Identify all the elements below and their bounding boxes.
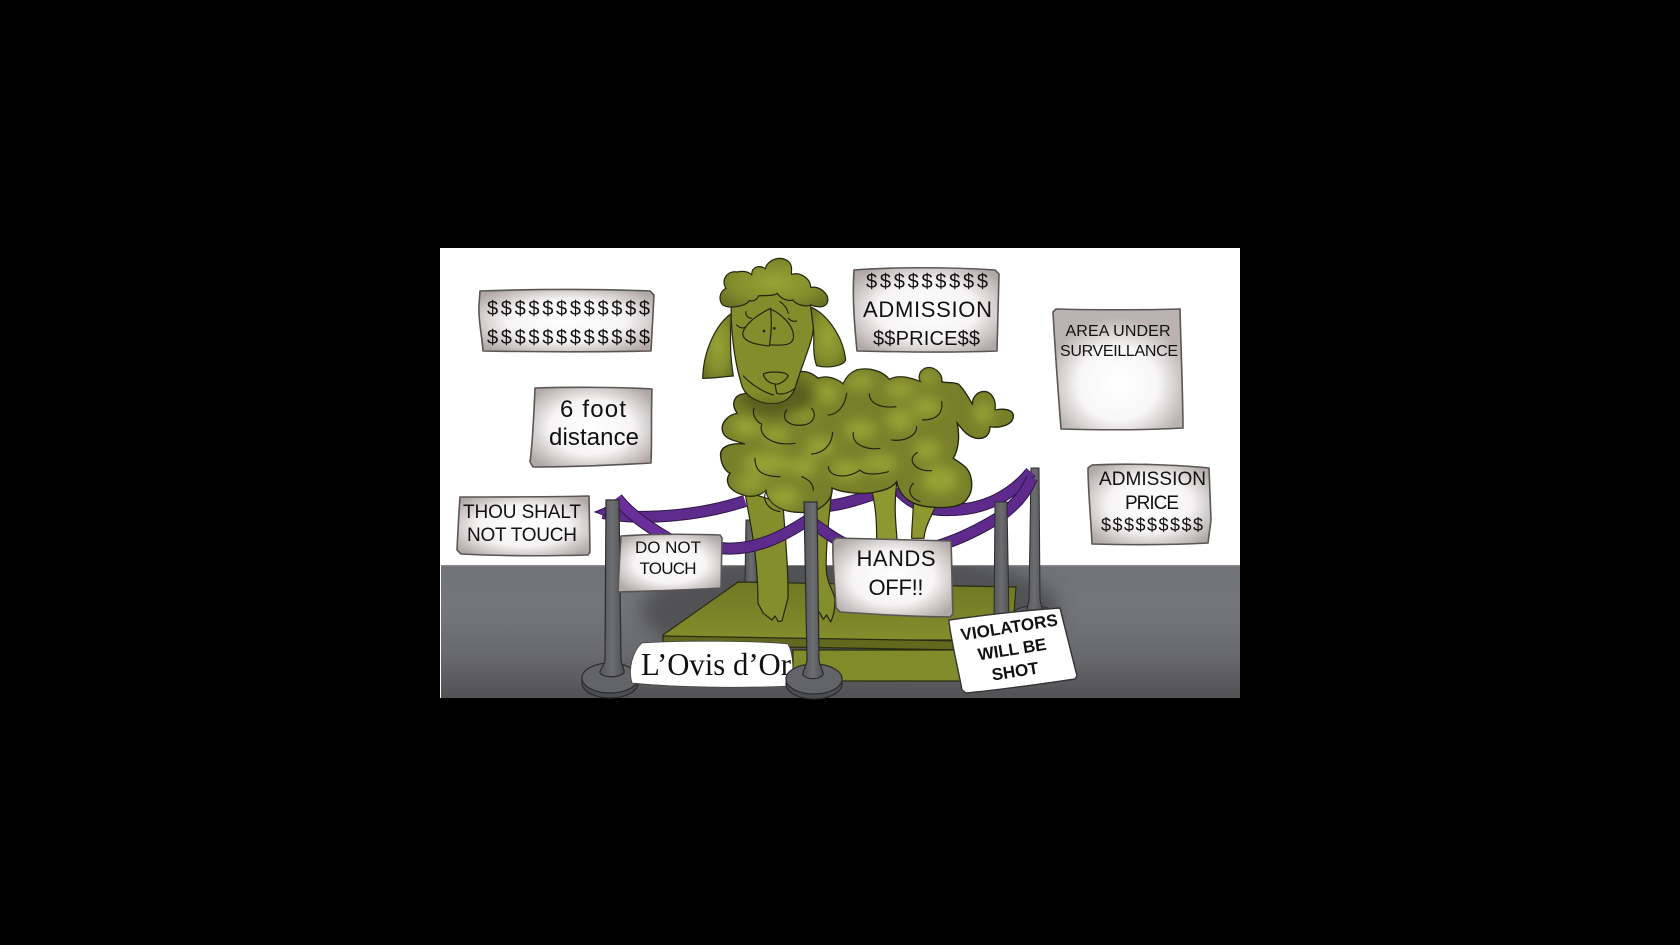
- sheep ears: [703, 307, 846, 378]
- back stanchion posts: [745, 468, 1054, 620]
- sign: dollars banner: $$$$$$$$$$$$: [487, 298, 650, 320]
- sign: area under surveillance: [1053, 309, 1183, 430]
- sign: dollars banner: [479, 290, 654, 352]
- front centre stanchion: [786, 502, 842, 699]
- background panel: [440, 248, 1240, 698]
- sign: do not touch: [618, 534, 722, 592]
- sign: area under surveillance: AREA UNDER: [1066, 323, 1170, 340]
- sign: 6 foot distance: distance: [549, 424, 639, 451]
- sign: violators will be shot: [949, 608, 1077, 693]
- sign: admission price right: ADMISSION: [1099, 469, 1206, 490]
- sign: admission price right: $$$$$$$$$: [1101, 515, 1203, 535]
- sign: admission price top: [853, 268, 999, 352]
- sign: L'Ovis d'Or: L’Ovis d’Or: [641, 646, 791, 682]
- sign: 6 foot distance: 6 foot: [560, 396, 626, 423]
- sign: violators will be shot: VIOLATORS: [959, 611, 1059, 645]
- back velvet rope: [595, 472, 1031, 542]
- sign: admission price top: $$PRICE$$: [873, 328, 980, 350]
- sign: thou shalt not touch: THOU SHALT: [463, 502, 581, 523]
- sign: hands off: OFF!!: [868, 575, 924, 600]
- sign: thou shalt not touch: NOT TOUCH: [467, 525, 577, 546]
- sheep legs: [745, 483, 937, 622]
- sign: violators will be shot: SHOT: [990, 658, 1040, 685]
- sign: dollars banner: $$$$$$$$$$$$: [487, 327, 650, 349]
- sign: admission price top: $$$$$$$$$: [866, 271, 988, 293]
- sheep wool body: [721, 368, 1013, 512]
- gallery floor: [441, 565, 1240, 698]
- sheep head: [719, 258, 828, 404]
- sign: area under surveillance: SURVEILLANCE: [1060, 343, 1178, 360]
- sign: 6 foot distance: [530, 387, 652, 467]
- front velvet rope: [720, 478, 1032, 553]
- sheep head wool tuft: [720, 258, 828, 307]
- sign: thou shalt not touch: [457, 496, 590, 556]
- sign: hands off: [833, 538, 953, 617]
- stepped pedestal: [663, 582, 1016, 681]
- sign: admission price right: PRICE: [1125, 493, 1179, 514]
- front left stanchion: [582, 500, 638, 698]
- sheep face: [737, 302, 797, 395]
- sign: do not touch: DO NOT: [635, 538, 701, 557]
- sheep statue: [703, 258, 1013, 622]
- sign: violators will be shot: WILL BE: [977, 635, 1048, 664]
- back right stanchion: [994, 502, 1009, 620]
- sign: admission price right: [1088, 464, 1211, 545]
- sign: do not touch: TOUCH: [640, 559, 696, 578]
- sign: admission price top: ADMISSION: [863, 297, 992, 322]
- sign: hands off: HANDS: [856, 546, 936, 571]
